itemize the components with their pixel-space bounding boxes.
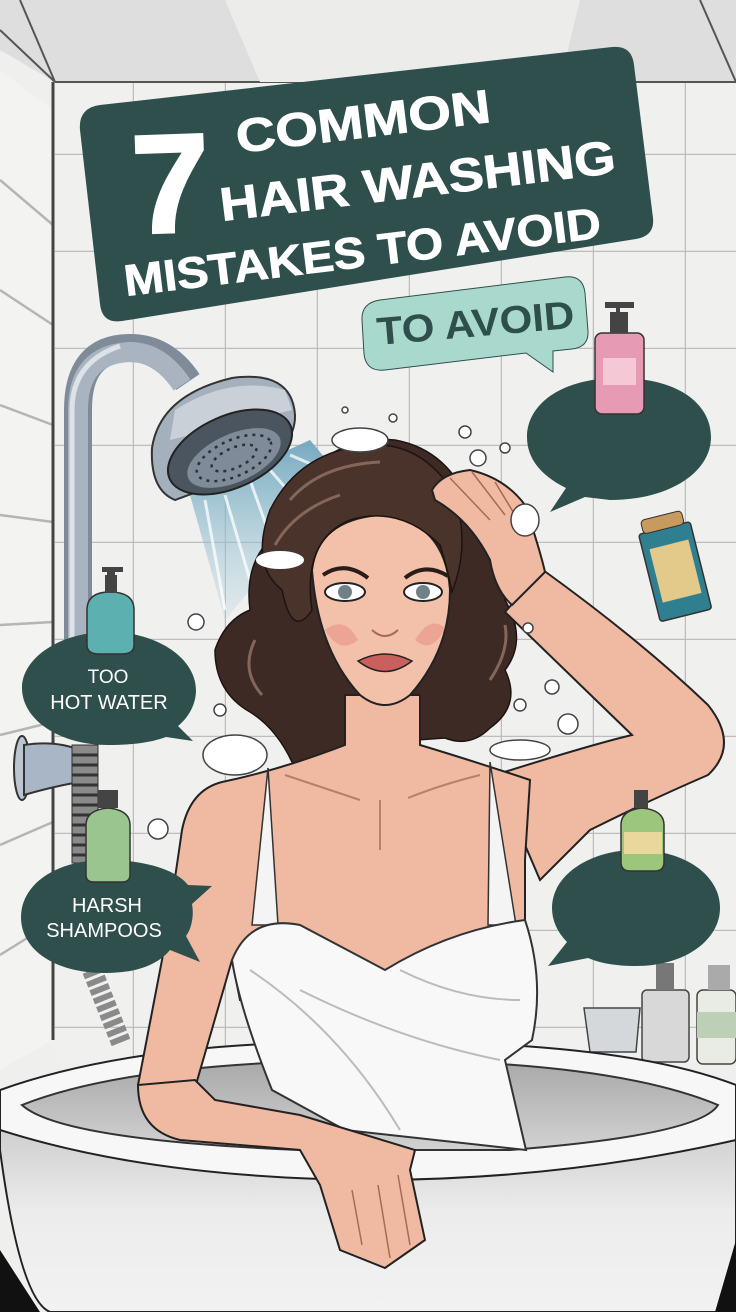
callout: harsh shampoos [21, 790, 212, 973]
title number 7: 7 [129, 104, 212, 263]
towel straps [252, 762, 516, 925]
callout: too hot water [22, 567, 196, 745]
collarbones [285, 775, 480, 850]
icon: pink pump bottle [595, 302, 644, 414]
icon: green bottle [86, 790, 130, 882]
icon: shelf bottles and cup [584, 963, 736, 1064]
illustration: woman [138, 440, 724, 1268]
hand on head [432, 470, 545, 605]
face [312, 515, 450, 705]
icon: green pump bottle [621, 790, 664, 871]
hair highlights [249, 462, 506, 695]
title banner [80, 47, 653, 321]
title line 1: COMMON [233, 79, 493, 163]
callout: too hot water: TOO [88, 667, 128, 688]
nose [372, 630, 398, 636]
eyes [323, 568, 448, 601]
ceiling [0, 0, 736, 82]
icon: teal pump bottle [87, 567, 134, 654]
icon: shower arm and hose [14, 346, 188, 1045]
title line 3: MISTAKES TO AVOID [121, 199, 604, 306]
callout: too hot water: HOT WATER [50, 692, 168, 714]
hair front [262, 445, 462, 621]
hair back [215, 440, 516, 826]
speech bubble: to avoid [362, 277, 588, 372]
lips [358, 654, 412, 672]
icon: blue product tube [635, 509, 712, 622]
icon: shower head [152, 377, 305, 512]
callout: empty top right [527, 302, 711, 512]
raised arm [495, 570, 724, 880]
callout: harsh shampoos: HARSH [72, 895, 142, 917]
title line 2: HAIR WASHING [217, 130, 618, 231]
icon: water spray [190, 440, 335, 620]
callout: empty lower right [548, 790, 720, 966]
towel [232, 920, 537, 1150]
resting arm and hand [138, 1080, 425, 1268]
blush [325, 624, 445, 646]
foam and water bubbles [148, 407, 578, 839]
illustration: bathtub [0, 1042, 736, 1312]
speech bubble: to avoid: TO AVOID [375, 294, 576, 354]
torso and left arm [138, 695, 530, 1096]
callout: harsh shampoos: SHAMPOOS [46, 920, 162, 942]
